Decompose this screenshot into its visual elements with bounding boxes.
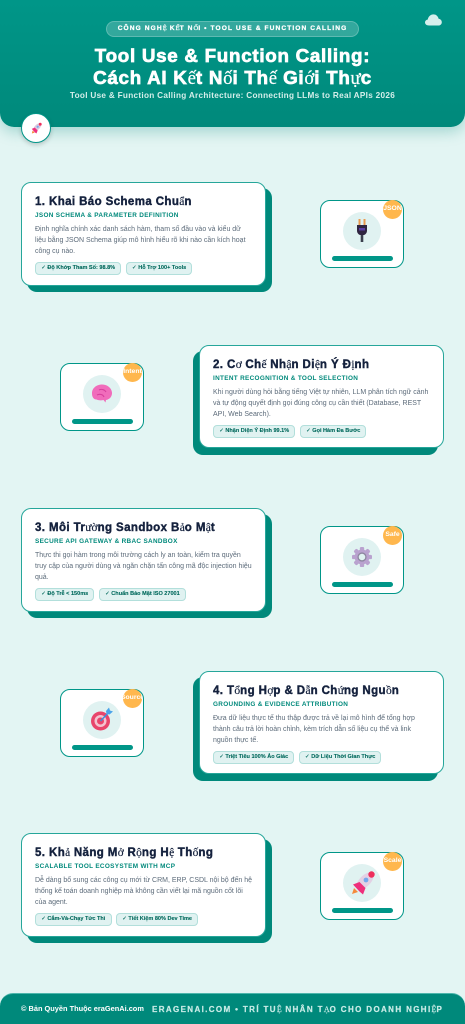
metric chips: ✓ Triệt Tiêu 100% Ảo Giác	[219, 754, 288, 760]
progress bar	[332, 908, 393, 913]
footer tagline: ERAGENAI.COM • TRÍ TUỆ NHÂN TẠO CHO DOANH NGHIỆP	[152, 1004, 443, 1014]
step heading: 2. Cơ Chế Nhận Diện Ý Định	[213, 359, 369, 371]
icon: cloud	[425, 14, 442, 26]
metric chips: ✓ Hỗ Trợ 100+ Tools	[132, 265, 186, 271]
description: Dễ dàng bổ sung các công cụ mới từ CRM, ERP, CSDL nội bộ đến hệ thống kế toán doanh nghiệp mà không cần viết lại mã nguồn cốt lõi của agent.	[35, 876, 252, 906]
badge: Safe	[385, 531, 400, 538]
subtitle: Tool Use & Function Calling Architecture: Connecting LLMs to Real APIs 2026	[70, 91, 395, 100]
panel: visual brain	[60, 363, 144, 431]
metric chips	[213, 751, 381, 764]
english subheading: GROUNDING & EVIDENCE ATTRIBUTION	[213, 701, 348, 708]
icon: rocket	[343, 864, 381, 902]
card body	[199, 671, 444, 774]
english subheading: SCALABLE TOOL ECOSYSTEM WITH MCP	[35, 863, 175, 870]
title line 1: Tool Use & Function Calling:	[95, 44, 370, 66]
metric chips	[35, 262, 192, 275]
panel: visual plug	[320, 200, 404, 268]
progress bar	[72, 745, 133, 750]
metric chips	[213, 425, 366, 438]
badge	[383, 526, 402, 545]
panel: visual gear	[320, 526, 404, 594]
icon: rocket medallion	[21, 113, 51, 143]
panel: visual rocket	[320, 852, 404, 920]
metric chips: ✓ Tiết Kiệm 80% Dev Time	[122, 916, 192, 922]
description: Thực thi gọi hàm trong môi trường cách ly an toàn, kiểm tra quyền truy cập của người dùng và ngăn chặn tấn công mã độc injection hiệu quả.	[35, 552, 252, 580]
footer bar	[0, 993, 465, 1024]
metric chips: ✓ Dữ Liệu Thời Gian Thực	[305, 754, 375, 760]
badge	[383, 200, 402, 219]
card shadow	[27, 514, 272, 618]
card body	[21, 508, 266, 612]
badge: JSON	[383, 205, 402, 212]
card shadow	[193, 351, 438, 455]
step heading: 1. Khai Báo Schema Chuẩn	[35, 196, 192, 208]
progress bar	[332, 256, 393, 261]
card shadow	[27, 188, 272, 292]
metric chips: ✓ Cắm-Và-Chạy Tức Thì	[41, 916, 105, 922]
metric chips: ✓ Nhận Diện Ý Định 99.1%	[219, 428, 289, 434]
english subheading: SECURE API GATEWAY & RBAC SANDBOX	[35, 538, 178, 545]
metric chips: ✓ Độ Khớp Tham Số: 98.8%	[41, 265, 115, 271]
panel: step 2	[193, 345, 444, 455]
copyright: © Bản Quyền Thuộc eraGenAi.com	[21, 1004, 144, 1013]
badge	[383, 852, 402, 871]
metric chips: ✓ Chuẩn Bảo Mật ISO 27001	[105, 591, 180, 597]
icon: target	[83, 701, 121, 739]
card body	[199, 345, 444, 448]
icon: plug	[343, 212, 381, 250]
metric chips: ✓ Độ Trễ < 150ms	[41, 591, 88, 597]
icon: brain	[83, 375, 121, 413]
english subheading: INTENT RECOGNITION & TOOL SELECTION	[213, 375, 358, 382]
description: Định nghĩa chính xác danh sách hàm, tham số đầu vào và kiểu dữ liệu bằng JSON Schema giúp mô hình hiểu rõ khi nào cần kích hoạt công cụ nào.	[35, 226, 246, 254]
metric chips	[35, 913, 198, 926]
card body	[21, 833, 266, 937]
badge	[123, 363, 142, 382]
step heading: 4. Tổng Hợp & Dẫn Chứng Nguồn	[213, 685, 399, 697]
title line 2: Cách AI Kết Nối Thế Giới Thực	[93, 67, 372, 89]
badge: Intent	[123, 368, 142, 375]
card shadow	[193, 677, 438, 781]
description: Khi người dùng hỏi bằng tiếng Việt tự nhiên, LLM phân tích ngữ cảnh và tự động quyết định gọi đúng công cụ cần thiết (Database, REST API, Web Search).	[213, 388, 428, 418]
english subheading: JSON SCHEMA & PARAMETER DEFINITION	[35, 212, 179, 219]
step heading: 5. Khả Năng Mở Rộng Hệ Thống	[35, 847, 213, 859]
category pill: CÔNG NGHỆ KẾT NỐI • TOOL USE & FUNCTION CALLING	[118, 25, 347, 32]
panel: step 5	[21, 833, 272, 943]
step heading: 3. Môi Trường Sandbox Bảo Mật	[35, 522, 215, 534]
card shadow	[27, 839, 272, 943]
card body	[21, 182, 266, 286]
icon: gear	[343, 538, 381, 576]
description: Đưa dữ liệu thực tế thu thập được trả về lại mô hình để tổng hợp thành câu trả lời hoàn chỉnh, kèm trích dẫn số liệu cụ thể và link nguồn thực tế.	[213, 714, 415, 744]
panel: step 1	[21, 182, 272, 292]
category pill	[106, 21, 359, 37]
progress bar	[332, 582, 393, 587]
metric chips: ✓ Gọi Hàm Đa Bước	[306, 428, 360, 434]
badge: Scale	[384, 857, 401, 864]
panel: visual target	[60, 689, 144, 757]
panel: step 3	[21, 508, 272, 618]
metric chips	[35, 588, 186, 601]
badge	[123, 689, 142, 708]
panel: step 4	[193, 671, 444, 781]
progress bar	[72, 419, 133, 424]
header banner	[0, 0, 465, 127]
